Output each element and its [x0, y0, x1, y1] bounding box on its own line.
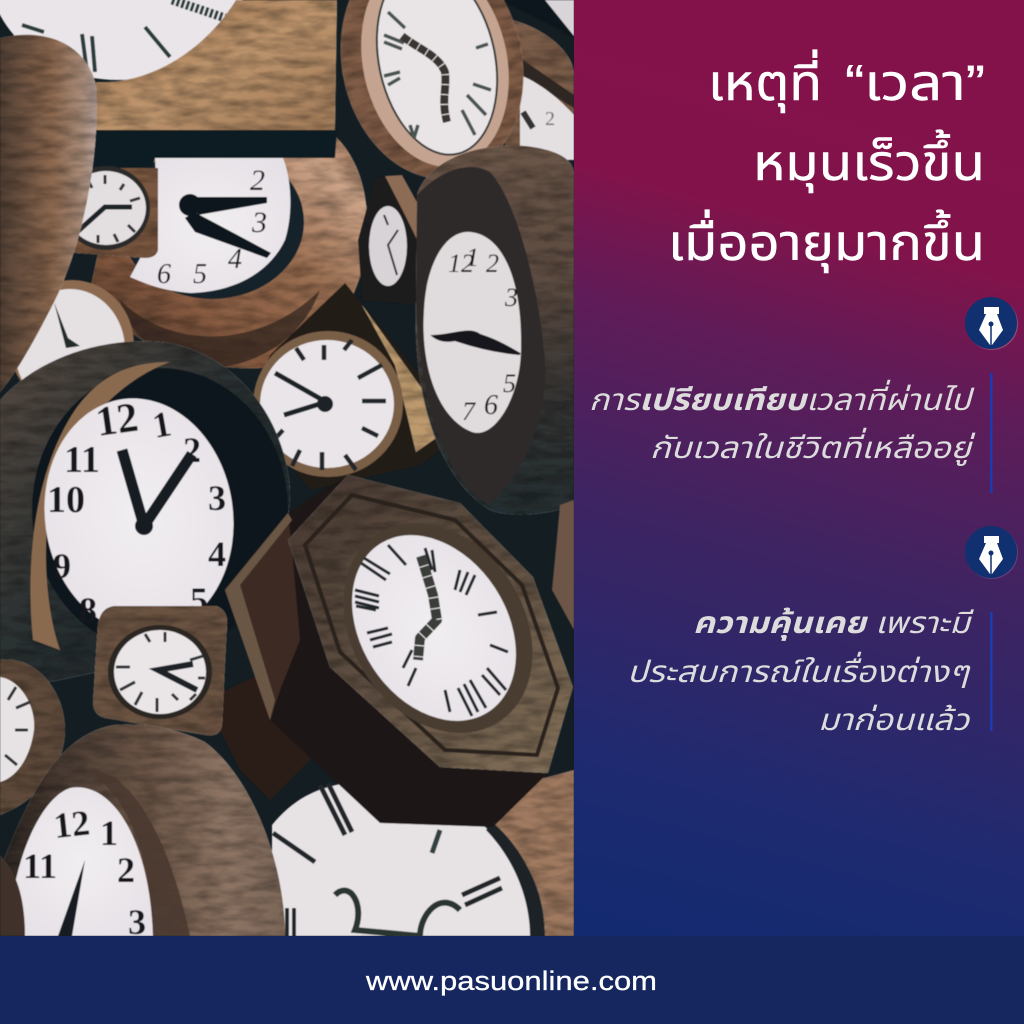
clock: small square top [62, 166, 158, 258]
clock: upper left small [15, 279, 134, 382]
clock: large numeral clock left: 2 [183, 430, 201, 470]
clock: central bronze: 4 [228, 244, 242, 275]
accent bar 1 [990, 373, 992, 493]
wood block: top bracket [96, 0, 337, 132]
shadow under wood block [92, 130, 337, 169]
title: เหตุที่ [708, 49, 822, 113]
clock: top right [340, 0, 524, 178]
clock: warped right case: 1 [466, 243, 479, 272]
panel: gradient background [574, 0, 1024, 936]
clock: bottom left barrel: 3 [128, 902, 146, 942]
clock: far right top: 2 [545, 108, 555, 130]
text block: comparison: กับเวลาในชีวิตที่เหลืออยู่ [650, 427, 976, 466]
title [668, 49, 985, 273]
icon: pen nib 2 [965, 526, 1018, 579]
clock: lower left small [0, 660, 65, 815]
clock: warped right case [416, 146, 574, 515]
clock: central bronze: 3 [251, 206, 267, 239]
clock: large numeral clock left: 9 [53, 546, 71, 586]
clock: central bronze: 2 [250, 164, 265, 197]
title: เมื่ออายุมากขึ้น [668, 209, 985, 273]
icon: pen nib 1 [965, 297, 1018, 350]
footer bar [0, 936, 1024, 1024]
clock: bottom left barrel [0, 724, 285, 942]
clock: bottom left barrel: 1 [100, 813, 118, 853]
clock: bottom left barrel: 12 [52, 802, 92, 846]
clock: bottom large face [272, 770, 574, 936]
text block: comparison [589, 379, 976, 466]
clock: large numeral clock left: 11 [64, 439, 100, 481]
clock: large numeral clock left: 4 [208, 534, 226, 574]
accent bar 2 [990, 612, 992, 731]
clock: warped right case: 6 [484, 390, 498, 421]
footer url: www.pasuonline.com [365, 966, 657, 996]
clock: far right top [500, 0, 574, 160]
clock: top cut-off face [0, 0, 248, 80]
clock: warped right case: 2 [486, 249, 499, 278]
clock: warped right case: 7 [462, 397, 476, 426]
clock: large numeral clock left [0, 341, 290, 690]
title: “เวลา” [845, 55, 985, 111]
clock: central bronze [90, 136, 367, 368]
clock: large numeral clock left: 8 [79, 590, 97, 630]
wood: dark back behind bottom clocks [205, 660, 310, 800]
clock: bottom left barrel: 2 [117, 850, 135, 890]
photo: pile of antique clocks [0, 0, 574, 942]
text block: comparison: การเปรียบเทียบ เวลาที่ผ่านไป [589, 379, 975, 417]
clock: central bronze: 5 [193, 259, 207, 290]
clock: warped right case: 3 [504, 283, 518, 312]
title: หมุนเร็วขึ้น [753, 129, 985, 193]
clock: large numeral clock left: 5 [190, 580, 208, 620]
text block: familiarity: มาก่อนแล้ว [818, 704, 970, 737]
clock: large numeral clock left: 12 [93, 395, 141, 446]
clock: narrow tilted [358, 174, 418, 305]
clock: large numeral clock left: 1 [149, 403, 174, 446]
text block: familiarity [627, 607, 975, 737]
clock: octagonal case [225, 475, 573, 827]
clock: diamond-shaped case [253, 282, 440, 490]
clock: large numeral clock left: 3 [208, 478, 226, 518]
wood sliver: right edge lower [552, 500, 574, 630]
wood pillar: left [0, 35, 97, 392]
clock: central bronze: 6 [157, 259, 171, 290]
text block: familiarity: ประสบการณ์ในเรื่องต่างๆ [627, 651, 971, 689]
clock: large numeral clock left: 10 [47, 479, 85, 521]
clock: warped right case: 12 [448, 249, 474, 278]
clock: warped right case: 5 [503, 369, 516, 398]
text block: familiarity: ความคุ้นเคย เพราะมี [693, 607, 975, 641]
clock: bottom left barrel: 11 [23, 846, 57, 886]
clock: small square bottom [93, 606, 227, 736]
